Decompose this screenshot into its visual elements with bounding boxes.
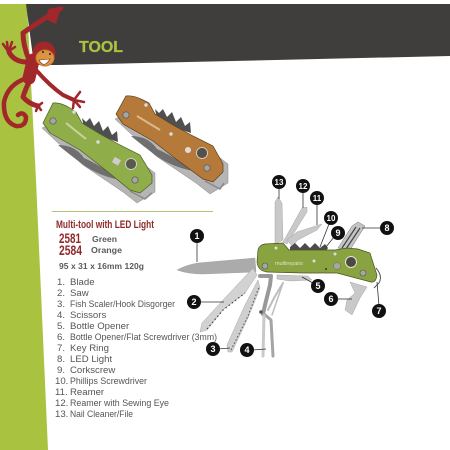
parts list: 2. — [57, 288, 65, 299]
callout 8: LED light: 8 — [384, 223, 390, 233]
icon: red monkey — [3, 8, 84, 126]
tool: screwdriver opener — [345, 282, 367, 315]
colour codes: 2584 — [59, 243, 82, 258]
parts list: 12. — [55, 398, 68, 409]
tool: scissors — [259, 276, 283, 356]
green side band — [0, 4, 48, 450]
rivets and holes — [262, 246, 366, 276]
product title: Multi-tool with LED Light — [56, 219, 154, 231]
heading: TOOL: TOOL — [79, 39, 123, 56]
parts list: Key Ring — [70, 343, 109, 354]
callout 8: LED light — [362, 221, 394, 235]
tool: bottle opener — [277, 275, 312, 281]
callout 9: corkscrew: 9 — [335, 228, 341, 238]
callout 4: scissors: 4 — [244, 345, 250, 355]
parts list: 10. — [55, 376, 68, 387]
tool: reamer with sewing eye — [283, 207, 307, 244]
callout 6: screwdriver opener: 6 — [328, 294, 334, 304]
callout 10: phillips screwdriver: 10 — [327, 214, 336, 223]
tool: LED light — [338, 222, 365, 250]
parts list: Nail Cleaner/File — [70, 409, 133, 420]
callout 13: nail file — [272, 175, 286, 199]
callout 3: fish scaler: 3 — [210, 344, 216, 354]
key ring — [374, 268, 380, 288]
parts list: Fish Scaler/Hook Disgorger — [70, 299, 176, 310]
parts list: 6. — [57, 332, 65, 343]
dimensions and weight: 95 x 31 x 16mm 120g — [59, 261, 144, 271]
callout 9: corkscrew — [326, 226, 345, 247]
tool: blade — [177, 258, 256, 274]
callout 5: bottle opener — [302, 277, 325, 293]
callout 1: blade: 1 — [194, 231, 200, 241]
colour codes: Green — [92, 234, 117, 244]
main tool diagram — [177, 197, 380, 356]
tool: corkscrew — [290, 243, 328, 252]
parts list: 1. — [57, 277, 65, 288]
callout 13: nail file: 13 — [275, 178, 284, 187]
parts list: Reamer — [70, 387, 105, 398]
parts list: 13. — [55, 409, 68, 420]
callout 4: scissors — [240, 343, 266, 357]
callout 3: fish scaler — [206, 342, 230, 356]
parts list: 4. — [57, 310, 65, 321]
divider — [52, 210, 213, 212]
tool: fish scaler — [227, 280, 260, 352]
parts list: 3. — [57, 299, 65, 310]
parts list: Bottle Opener/Flat Screwdriver (3mm) — [70, 332, 217, 343]
parts list: Bottle Opener — [70, 321, 130, 332]
dark header band — [26, 4, 450, 65]
callout 7: key ring — [372, 282, 386, 318]
product photo: orange multi-tool — [115, 96, 228, 194]
callout 6: screwdriver opener — [324, 292, 352, 306]
tool: nail file — [275, 197, 283, 244]
callout 7: key ring: 7 — [376, 306, 382, 316]
parts list: Saw — [70, 288, 89, 299]
parts list: 8. — [57, 354, 65, 365]
colour codes — [59, 231, 122, 258]
parts list: Scissors — [70, 310, 106, 321]
brand mark: multirepairs — [275, 261, 304, 267]
callout 12: reamer with sewing eye — [296, 179, 310, 208]
callout 11: reamer — [310, 191, 324, 225]
colour codes: Orange — [91, 245, 122, 255]
callout 5: bottle opener: 5 — [315, 281, 321, 291]
parts list: 5. — [57, 321, 65, 332]
callout 10: phillips screwdriver — [320, 211, 338, 247]
parts list — [55, 277, 217, 420]
tool body — [257, 243, 377, 282]
parts list: Blade — [70, 277, 95, 288]
callout 1: blade — [190, 229, 204, 262]
parts list: 7. — [57, 343, 65, 354]
callout 2: saw: 2 — [191, 297, 197, 307]
callout 2: saw — [187, 295, 224, 309]
parts list: LED Light — [70, 354, 112, 365]
parts list: Corkscrew — [70, 365, 115, 376]
tool: saw — [200, 268, 257, 332]
parts list: Phillips Screwdriver — [70, 376, 148, 387]
parts list: 11. — [55, 387, 68, 398]
parts list: Reamer with Sewing Eye — [70, 398, 169, 409]
callout 11: reamer: 11 — [313, 194, 322, 203]
colour codes: 2581 — [59, 231, 81, 246]
parts list: 9. — [57, 365, 65, 376]
product photo: green multi-tool — [42, 103, 155, 203]
callout 12: reamer with sewing eye: 12 — [299, 182, 308, 191]
tool: reamer — [287, 224, 322, 246]
